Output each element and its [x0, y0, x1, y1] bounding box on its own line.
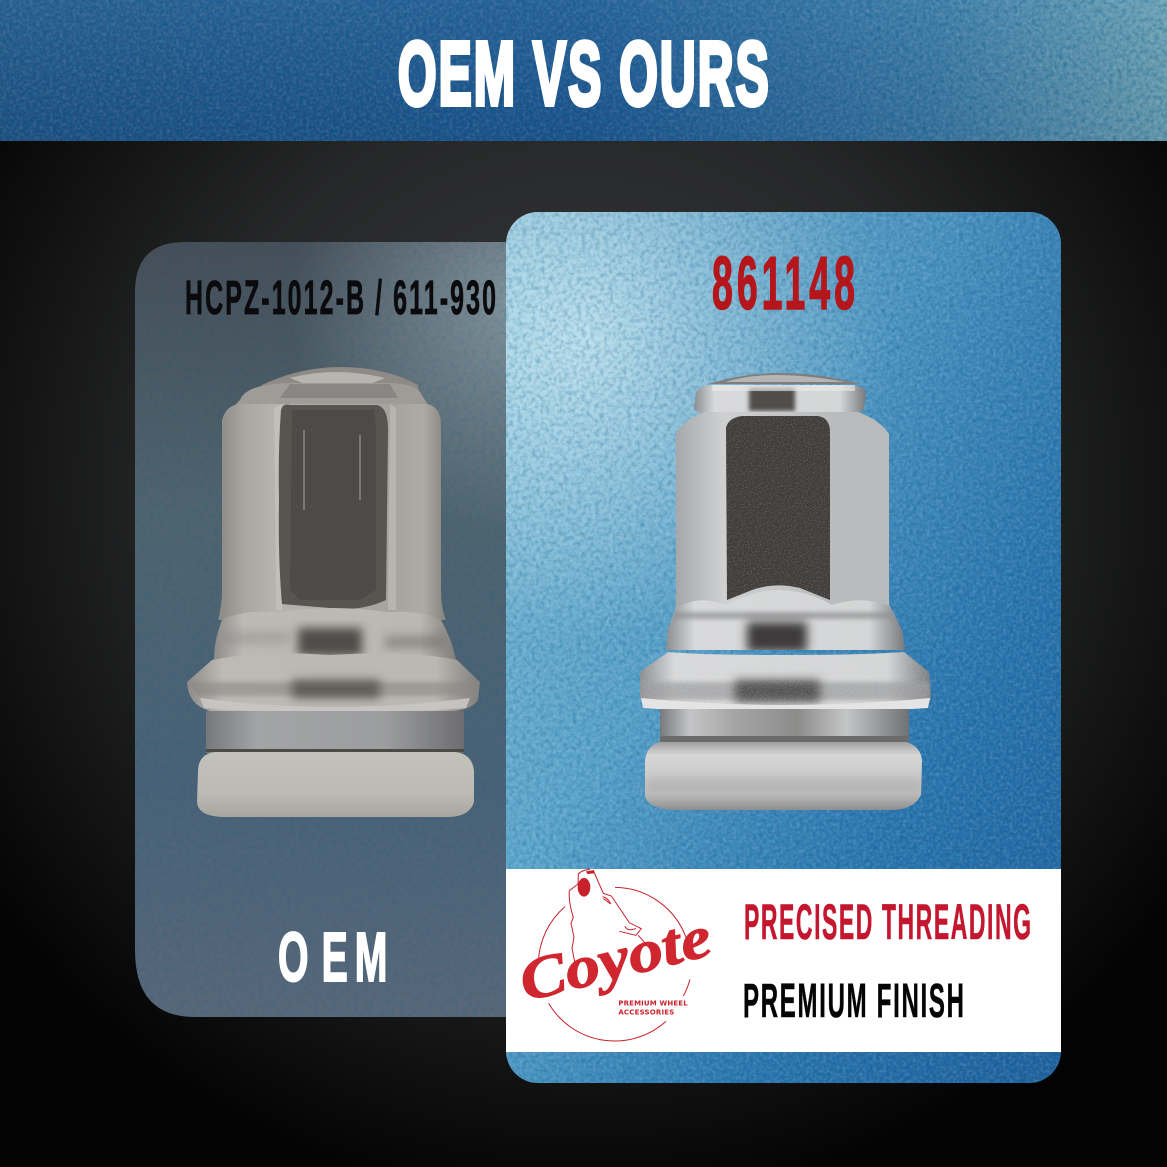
our lug nut [640, 373, 931, 810]
Coyote logo: ACCESSORIES [618, 1008, 674, 1016]
feature: precised threading: PRECISED THREADING [744, 895, 1031, 951]
OEM lug nut [187, 367, 480, 817]
white info band [506, 869, 1061, 1052]
Coyote wordmark: Coyote [513, 903, 718, 1014]
panel: OEM [135, 242, 520, 1017]
title: OEM VS OURS [398, 24, 769, 124]
OEM label: OEM [278, 919, 387, 997]
our part number: 861148 [712, 241, 855, 325]
feature: premium finish: PREMIUM FINISH [743, 975, 964, 1028]
title banner [0, 0, 1167, 141]
logo tagline: PREMIUM WHEEL [618, 1000, 688, 1008]
OEM part number: HCPZ-1012-B / 611-930 [185, 271, 496, 325]
Coyote logo [513, 869, 718, 1041]
panel: ours [506, 212, 1061, 1083]
